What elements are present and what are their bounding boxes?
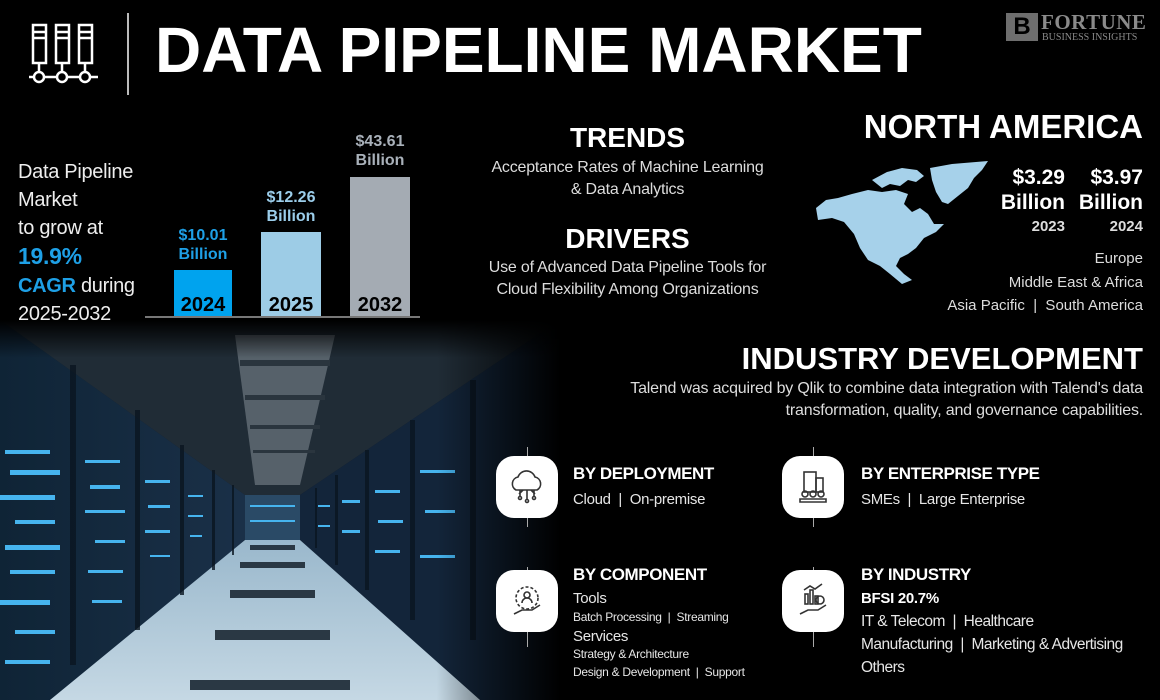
bar chart: $43.61 — [356, 133, 404, 150]
segment: by component — [496, 565, 745, 678]
segment: by industry: IT & Telecom | Healthcare — [861, 613, 1034, 630]
segment: by industry: BY INDUSTRY — [861, 565, 971, 584]
text block: CAGR — [18, 161, 135, 325]
icon: server header icon — [29, 24, 98, 84]
trends — [491, 122, 764, 198]
industry development: INDUSTRY DEVELOPMENT — [742, 341, 1143, 376]
segment: by enterprise type — [782, 456, 1040, 518]
drivers: DRIVERS — [565, 223, 690, 254]
segment: by industry: BFSI 20.7% — [861, 590, 939, 607]
trends: TRENDS — [570, 122, 685, 153]
bar chart: $12.26 — [267, 189, 315, 206]
logo — [1006, 10, 1146, 43]
segment: by deployment — [496, 456, 714, 518]
text block: CAGR: Data Pipeline — [18, 161, 133, 183]
stat: north america values: $3.29 — [1012, 166, 1065, 189]
text: other regions: Asia Pacific | South America — [947, 297, 1143, 314]
trends: & Data Analytics — [571, 181, 684, 198]
bar chart: 2032 — [358, 294, 402, 316]
bar chart: Billion — [267, 208, 315, 225]
drivers: Use of Advanced Data Pipeline Tools for — [489, 259, 766, 276]
icon: hand with person — [496, 570, 558, 632]
segment: by component: Services — [573, 628, 628, 645]
text: Billion — [1079, 191, 1143, 214]
stat: north america values: 2023 — [1032, 218, 1065, 235]
text: $3.97 — [1090, 166, 1143, 189]
logo: FORTUNE — [1041, 10, 1146, 34]
stat: north america values — [1001, 166, 1065, 235]
heading: north america: NORTH AMERICA — [864, 108, 1143, 145]
trends: Acceptance Rates of Machine Learning — [491, 159, 764, 176]
text block: CAGR: Market — [18, 189, 77, 211]
icon: cloud — [496, 456, 558, 518]
bar chart: Billion — [179, 246, 227, 263]
text: other regions: Europe — [1095, 250, 1143, 267]
bar chart: 2025 — [269, 294, 313, 316]
segment: by deployment: Cloud | On-premise — [573, 491, 705, 508]
industry development — [630, 341, 1144, 419]
text: 2024 — [1110, 218, 1143, 235]
segment: by component: Strategy & Architecture — [573, 647, 689, 661]
map: north america — [816, 161, 988, 284]
segment: by deployment: BY DEPLOYMENT — [573, 464, 714, 483]
segment: by enterprise type: SMEs | Large Enterprise — [861, 491, 1025, 508]
text block: CAGR: 2025-2032 — [18, 303, 111, 325]
icon: buildings — [782, 456, 844, 518]
logo: B — [1013, 13, 1031, 40]
industry development: Talend was acquired by Qlik to combine data integration with Talend's data — [630, 380, 1143, 397]
segment: by component: Tools — [573, 590, 607, 607]
text block: CAGR: CAGR during — [18, 275, 135, 297]
bar chart: 2024 — [181, 294, 225, 316]
logo: BUSINESS INSIGHTS — [1042, 32, 1137, 43]
bar chart: Billion — [356, 152, 404, 169]
icon: finance hand — [782, 570, 844, 632]
stat: north america values: Billion — [1001, 191, 1065, 214]
segment: by industry: Manufacturing | Marketing & Advertising — [861, 636, 1123, 653]
segment: by component: Batch Processing | Streaming — [573, 610, 729, 624]
segment: by industry — [782, 565, 1123, 676]
text block: CAGR: 19.9% — [18, 243, 82, 269]
text: other regions — [947, 250, 1143, 314]
title: DATA PIPELINE MARKET — [155, 14, 922, 86]
segment: by enterprise type: BY ENTERPRISE TYPE — [861, 464, 1040, 483]
text block: CAGR: to grow at — [18, 217, 103, 239]
text: other regions: Middle East & Africa — [1009, 274, 1143, 290]
background photo: data center corridor — [0, 326, 543, 700]
connector lines — [527, 447, 528, 527]
segment: by component: BY COMPONENT — [573, 565, 707, 584]
drivers: Cloud Flexibility Among Organizations — [496, 281, 759, 298]
segment: by component: Design & Development | Support — [573, 664, 745, 678]
industry development: transformation, quality, and governance capabilities. — [786, 402, 1143, 419]
drivers — [489, 223, 766, 298]
bar chart: $10.01 — [179, 227, 227, 244]
segment: by industry: Others — [861, 659, 905, 676]
bar chart — [145, 133, 420, 318]
